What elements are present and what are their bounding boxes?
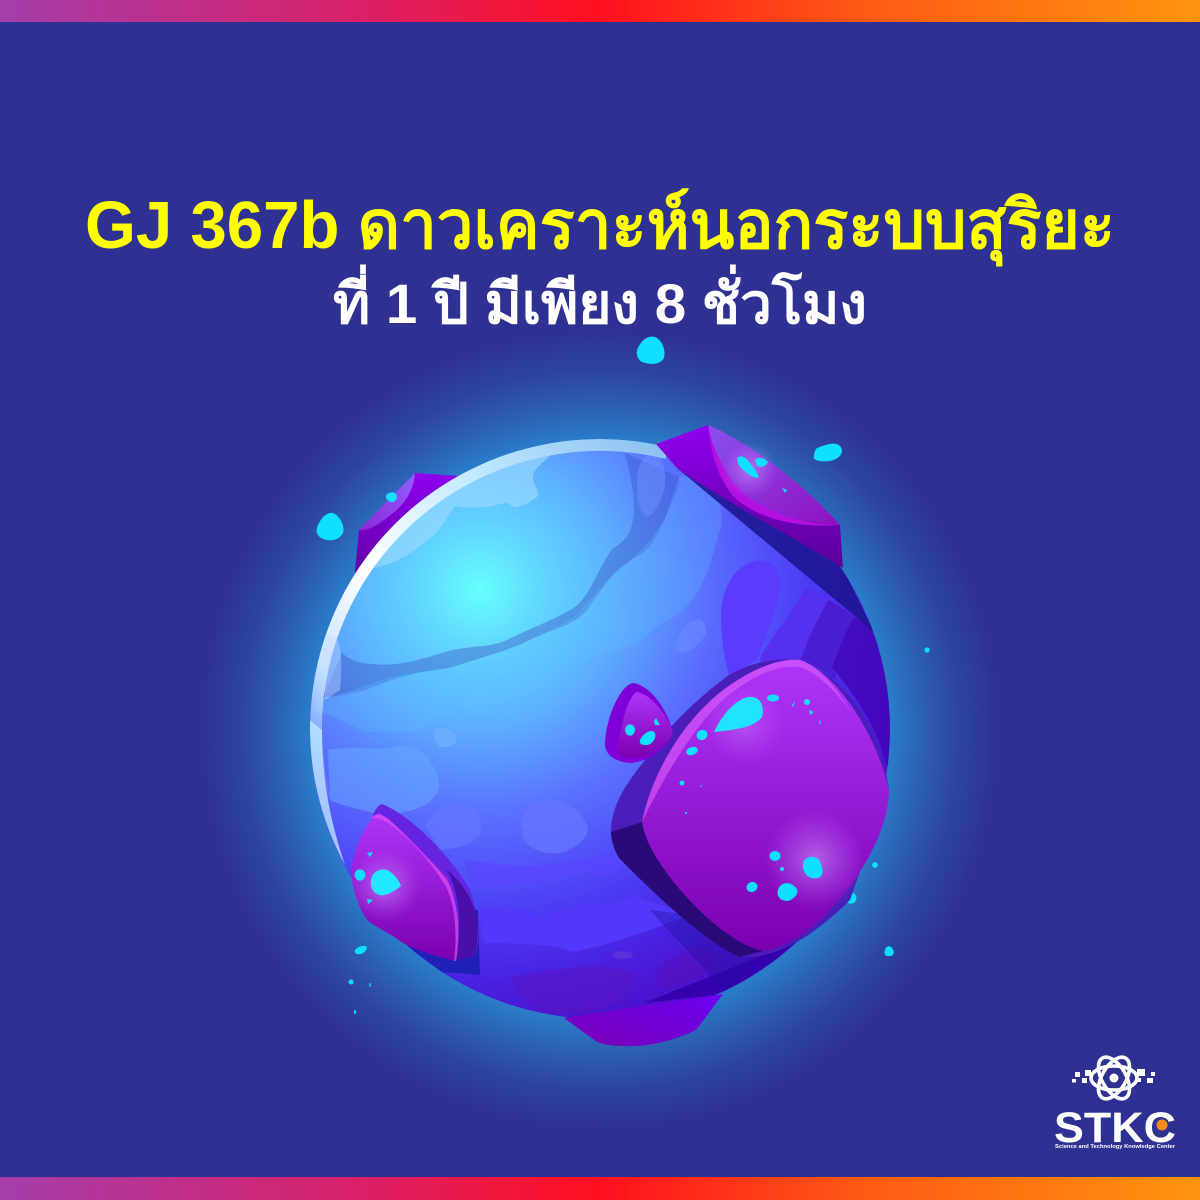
data squares xyxy=(1072,1069,1155,1083)
rock: big xyxy=(611,659,889,957)
atom icon xyxy=(1091,1052,1137,1104)
spots xyxy=(737,456,758,478)
rim light xyxy=(642,660,850,822)
large spot xyxy=(714,697,763,732)
title line 1: GJ 367b ดาวเคราะห์นอกระบบสุริยะ xyxy=(85,188,1115,267)
back xyxy=(368,804,478,961)
back side xyxy=(611,659,889,957)
surface patch: top oval xyxy=(637,454,665,516)
shade under big rock xyxy=(644,942,796,1003)
surface patch: right oval xyxy=(721,560,780,675)
glass patch xyxy=(322,634,341,700)
spots xyxy=(680,694,823,901)
rock: top left base xyxy=(355,473,460,590)
lower dark side xyxy=(611,822,763,957)
rim highlight xyxy=(316,445,667,800)
dark winding band xyxy=(323,453,679,697)
rock: top right xyxy=(656,425,843,568)
surface patch: left block xyxy=(328,746,439,814)
base xyxy=(605,683,673,763)
top gradient bar xyxy=(0,0,1200,22)
surface patch: center blob xyxy=(521,800,588,853)
face xyxy=(642,660,889,951)
logo tagline: Science and Technology Knowledge Center xyxy=(1055,1144,1175,1150)
rim xyxy=(370,815,458,961)
planet xyxy=(300,439,895,1019)
face xyxy=(352,813,457,961)
surface patch: small blob xyxy=(434,728,457,747)
logo orange dot xyxy=(1156,1120,1168,1130)
rock: bottom xyxy=(564,994,723,1046)
dark edge xyxy=(447,870,478,961)
title line 2: ที่ 1 ปี มีเพียง 8 ชั่วโมง xyxy=(333,264,867,335)
left rock shadow xyxy=(406,910,480,975)
rock: lower left xyxy=(349,804,478,961)
bottom gradient bar xyxy=(0,1177,1200,1200)
right far shade xyxy=(832,617,890,767)
spots xyxy=(355,852,401,904)
glow xyxy=(765,810,865,910)
pale left edge xyxy=(310,720,345,865)
face xyxy=(618,692,673,758)
upper light zone xyxy=(342,440,576,596)
surface patch: left blob xyxy=(426,822,480,850)
glow xyxy=(722,442,778,498)
rock shadow overlay xyxy=(650,910,759,994)
base xyxy=(656,425,843,568)
light lower band xyxy=(311,476,722,732)
surface patch: small oval xyxy=(675,620,706,653)
STKC logo xyxy=(1054,1052,1176,1152)
rim xyxy=(708,425,840,526)
sphere xyxy=(310,439,890,1019)
spots xyxy=(625,718,660,745)
right dark stripe xyxy=(800,600,855,680)
lower purple bands xyxy=(464,859,618,878)
glow xyxy=(349,849,421,921)
right light stripe xyxy=(759,587,828,662)
rock face xyxy=(359,473,415,530)
floating droplets xyxy=(317,337,930,1014)
rock: small centre xyxy=(605,683,673,763)
rock spot xyxy=(386,492,397,502)
top rock shadow xyxy=(677,468,874,632)
planet halo xyxy=(200,330,1000,1130)
logo wordmark: STKC xyxy=(1054,1104,1176,1152)
face xyxy=(708,425,840,525)
